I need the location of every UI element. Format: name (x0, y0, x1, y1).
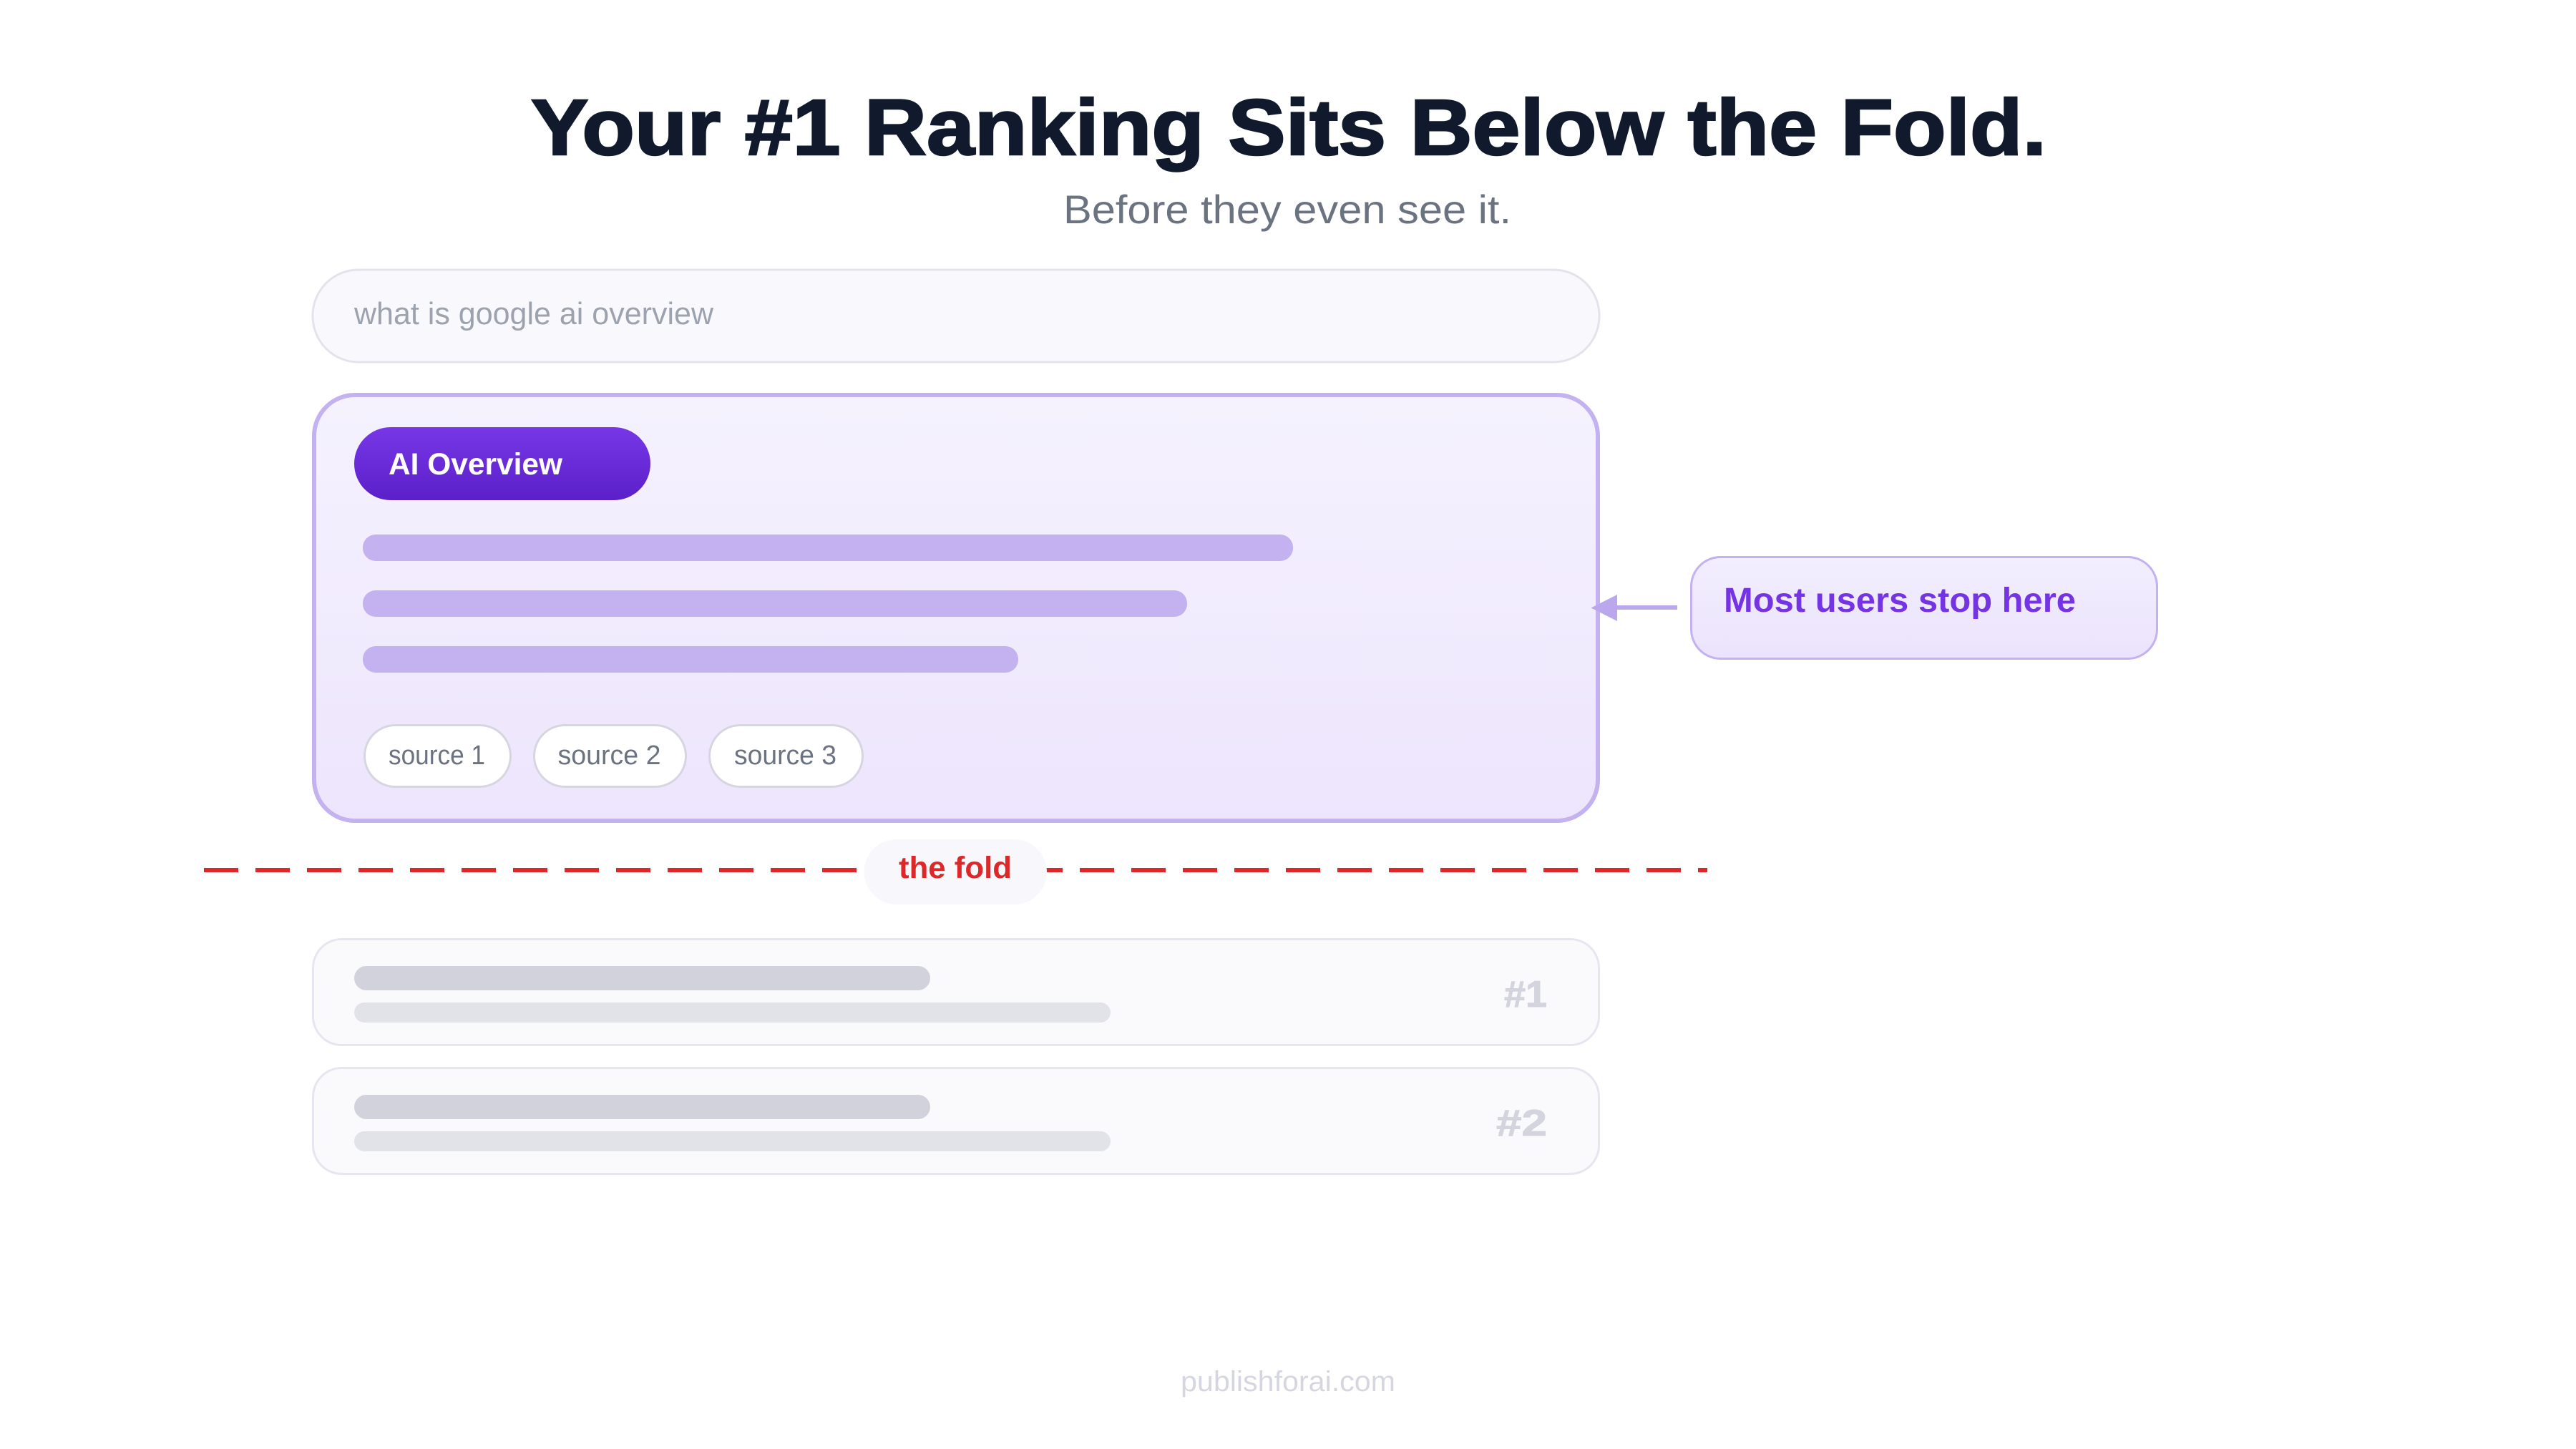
search query text: what is google ai overview (353, 296, 713, 331)
source chip 1: source 1 (389, 741, 485, 771)
rank label #2: #2 (1496, 1103, 1547, 1144)
callout: most users stop here (1692, 557, 2157, 658)
source chip 3 (710, 726, 863, 787)
result card #1 (313, 939, 1599, 1045)
badge: AI Overview (354, 427, 650, 500)
rank label #1: #1 (1504, 974, 1547, 1015)
search bar (313, 270, 1599, 362)
source chip 2: source 2 (558, 741, 661, 771)
badge: AI Overview: AI Overview (389, 447, 563, 482)
source chip 3: source 3 (734, 741, 836, 771)
arrow: pointing to AI Overview (1591, 595, 1677, 621)
answer text placeholder lines (363, 535, 1293, 673)
result card #2 (313, 1068, 1599, 1174)
source chip 1 (365, 726, 511, 787)
subtitle: Before they even see it. (1063, 187, 1511, 232)
panel: AI Overview (314, 395, 1598, 821)
fold label: the fold (899, 851, 1012, 885)
fold label (864, 839, 1047, 904)
fold line (204, 868, 1707, 872)
source chip 2 (534, 726, 686, 787)
footer: publishforai.com (1181, 1366, 1395, 1397)
callout: most users stop here: Most users stop here (1724, 582, 2076, 620)
title: Your #1 Ranking Sits Below the Fold. (531, 84, 2046, 172)
